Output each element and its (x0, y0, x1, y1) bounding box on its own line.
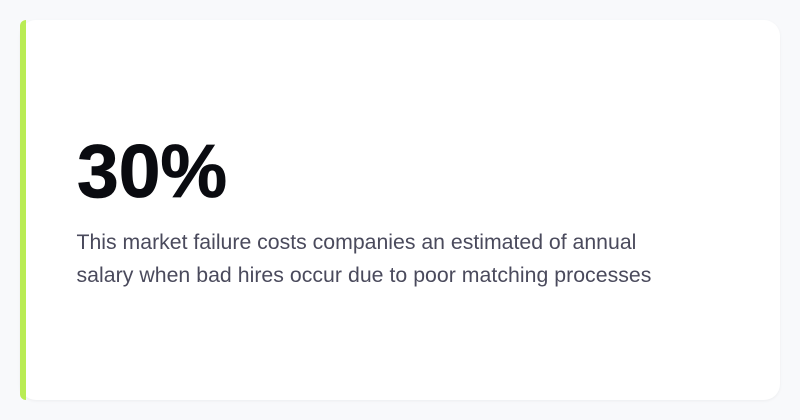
big statistic: 30% (77, 129, 227, 213)
description text: This market failure costs companies an estimated of annual (76, 230, 636, 254)
description text: salary when bad hires occur due to poor matching processes (76, 263, 651, 287)
description text (76, 230, 651, 287)
accent bar (20, 20, 26, 400)
